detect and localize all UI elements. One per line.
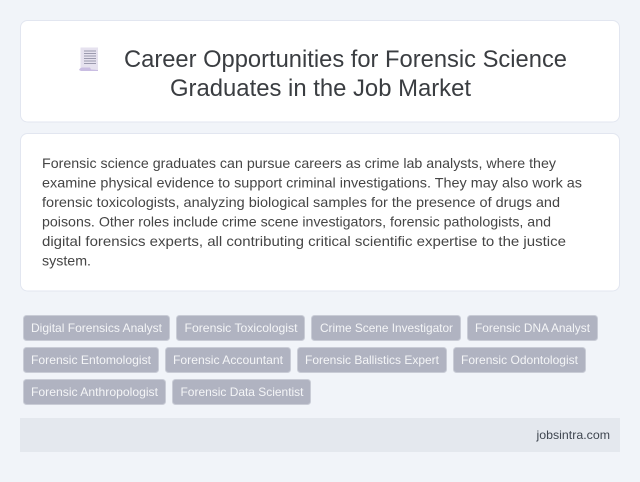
tag: Digital Forensics Analyst xyxy=(24,316,170,340)
tag: Forensic Ballistics Expert xyxy=(298,348,446,372)
tag: Forensic Toxicologist: Forensic Toxicologist xyxy=(184,321,298,335)
tags xyxy=(24,316,598,404)
tag: Forensic Entomologist xyxy=(24,348,158,372)
description text: Forensic science graduates can pursue careers as crime lab analysts, where they xyxy=(42,155,556,171)
tag: Crime Scene Investigator xyxy=(312,316,460,340)
tag: Forensic Odontologist: Forensic Odontologist xyxy=(461,353,579,367)
footer: jobsintra.com xyxy=(535,428,610,442)
description text: poisons. Other roles include crime scene investigators, forensic pathologists, and xyxy=(42,214,551,230)
description text: examine physical evidence to support criminal investigations. They may also work as xyxy=(42,174,582,190)
tag: Forensic Accountant: Forensic Accountant xyxy=(173,353,284,367)
footer xyxy=(20,418,620,452)
tag: Forensic Data Scientist: Forensic Data Scientist xyxy=(180,385,304,399)
tag: Forensic Data Scientist xyxy=(172,380,310,404)
panel: header xyxy=(20,20,620,122)
description text: forensic toxicologists, analyzing biological samples for the presence of drugs and xyxy=(42,194,560,210)
description text: system. xyxy=(42,252,91,268)
tag: Forensic Anthropologist xyxy=(24,380,166,404)
tag: Forensic Toxicologist xyxy=(176,316,304,340)
tag: Forensic Accountant xyxy=(166,348,290,372)
title xyxy=(124,46,567,102)
title: Career Opportunities for Forensic Science xyxy=(124,46,567,73)
title: Graduates in the Job Market xyxy=(170,75,471,102)
tag: Forensic DNA Analyst: Forensic DNA Analyst xyxy=(475,321,591,335)
tag: Forensic DNA Analyst xyxy=(468,316,598,340)
tag: Forensic Entomologist: Forensic Entomologist xyxy=(31,353,152,367)
panel: description xyxy=(20,134,620,291)
description text xyxy=(42,155,582,268)
icon: scroll document xyxy=(79,48,98,71)
tag: Forensic Ballistics Expert: Forensic Ballistics Expert xyxy=(305,353,440,367)
tag: Digital Forensics Analyst: Digital Forensics Analyst xyxy=(31,321,163,335)
tag: Crime Scene Investigator: Crime Scene Investigator xyxy=(320,321,453,335)
tag: Forensic Anthropologist: Forensic Anthropologist xyxy=(31,385,159,399)
tag: Forensic Odontologist xyxy=(454,348,586,372)
description text: digital forensics experts, all contributing critical scientific expertise to the justice xyxy=(42,233,566,249)
